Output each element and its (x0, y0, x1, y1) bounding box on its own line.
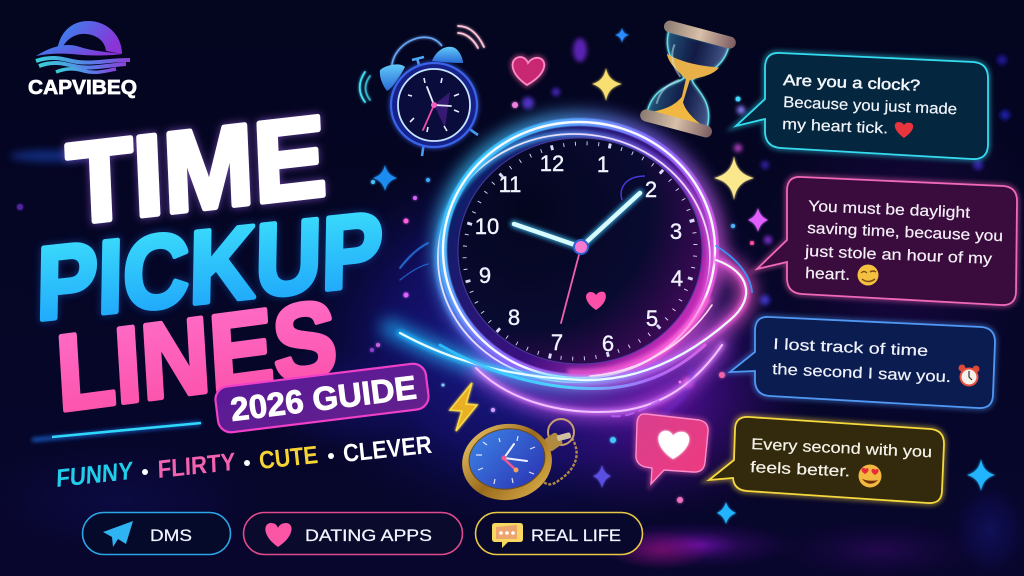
title line: LINES: LINES (53, 277, 340, 434)
icon: chat bubble (492, 523, 523, 548)
tag: CLEVER: CLEVER (342, 431, 433, 468)
icon: magenta sparkle (748, 208, 768, 232)
clock numerals (475, 151, 683, 356)
pill: DMS (82, 512, 230, 554)
icon: blue sparkle lower (717, 502, 736, 524)
bubble: every second: Every second with you (751, 436, 932, 461)
clock outer neon ring (438, 122, 715, 382)
icon: yellow sparkle right (714, 156, 754, 200)
bubble: every second: feels better. (750, 459, 850, 481)
icon: neon heart (513, 57, 544, 85)
clock dial (458, 138, 702, 364)
bubble: daylight saving time: just stole an hour of my (804, 243, 993, 268)
separator dot (244, 460, 250, 466)
main clock (438, 118, 720, 384)
bubble: daylight saving time: heart. (805, 265, 851, 284)
title line: PICKUP: PICKUP (36, 189, 384, 342)
bubble: are you a clock (736, 53, 988, 159)
clock numerals: 8 (508, 305, 520, 330)
decorative particles (17, 38, 1010, 503)
icon: blue sparkle left (373, 165, 397, 191)
bubble: daylight saving time: You must be daylight (808, 198, 971, 222)
orbit swooshes (390, 260, 746, 412)
clock numerals: 3 (670, 219, 682, 244)
title: TIME PICKUP LINES (10, 93, 384, 434)
clock numerals: 9 (479, 263, 491, 288)
clock numerals: 2 (645, 177, 657, 202)
title line: PICKUP: PICKUP (36, 189, 384, 342)
icon: hourglass (639, 19, 737, 139)
pill: DATING APPS (244, 512, 462, 554)
clock numerals: 12 (540, 151, 564, 176)
icon: winking face (858, 264, 878, 286)
icon: lightning bolt (450, 383, 477, 431)
logo: CAPVIBEQ (28, 21, 137, 99)
icon: yellow sparkle (592, 68, 622, 101)
pill: REAL LIFE: REAL LIFE (531, 526, 621, 545)
clock numerals: 11 (499, 172, 521, 197)
icon: pink heart (265, 523, 292, 547)
clock numerals: 4 (671, 266, 683, 291)
clock numerals: 10 (475, 214, 499, 239)
badge: 2026 GUIDE: 2026 GUIDE (228, 368, 418, 428)
bubble: lost track of time: I lost track of time (773, 336, 928, 360)
clock hands (514, 193, 640, 323)
tag: FLIRTY: FLIRTY (157, 448, 236, 484)
separator dot (328, 453, 334, 459)
minute ticks (440, 118, 720, 384)
bubble: lost track of time: the second I saw you. (772, 361, 951, 386)
clock numerals: 7 (551, 330, 563, 355)
icon: red heart (895, 122, 913, 138)
accent line (32, 423, 201, 440)
icon: alarm clock (380, 37, 478, 156)
pill: DATING APPS: DATING APPS (305, 526, 432, 545)
icon: heart chat bubble (636, 414, 708, 484)
bubble: lost track of time (730, 317, 995, 408)
bubble: daylight saving time (757, 177, 1017, 305)
bubble: are you a clock: my heart tick. (782, 116, 888, 137)
logo icon: sun arc and waves (36, 21, 130, 72)
bubble: are you a clock: Are you a clock? (783, 72, 921, 95)
bubble: daylight saving time: saving time, because you (807, 220, 1003, 245)
bubble: are you a clock: Because you just made (783, 94, 957, 118)
icon: alarm clock emoji (958, 364, 980, 386)
logo wordmark: CAPVIBEQ (28, 77, 137, 99)
watch ring and crown (542, 419, 574, 452)
title line: TIME: TIME (65, 93, 328, 249)
icon: heart eyes face (858, 464, 882, 488)
watch chain (542, 438, 577, 484)
pill: REAL LIFE (476, 512, 642, 554)
clock heart (586, 292, 606, 310)
clock numerals: 1 (597, 152, 609, 177)
pill: DMS: DMS (150, 526, 192, 545)
tagline: funny flirty cute clever (56, 431, 433, 493)
tag: CUTE: CUTE (258, 441, 319, 475)
icon: blue sparkle top (615, 28, 629, 43)
tag: FUNNY: FUNNY (56, 457, 134, 493)
clock numerals: 6 (602, 331, 614, 356)
orbit front streaks (400, 243, 752, 432)
icon: blue sparkle right (967, 459, 995, 491)
icon: alarm vibration lines right (458, 26, 484, 48)
title line: TIME: TIME (65, 93, 328, 249)
small purple arc near 2 (621, 176, 645, 200)
separator dot (142, 469, 148, 475)
icon: paper plane (103, 521, 133, 547)
icon: alarm vibration lines left (360, 72, 370, 102)
icon: pocket watch (457, 418, 577, 506)
icon: violet sparkle (593, 465, 611, 488)
clock numerals: 5 (646, 306, 658, 331)
bubble: every second (709, 417, 944, 503)
